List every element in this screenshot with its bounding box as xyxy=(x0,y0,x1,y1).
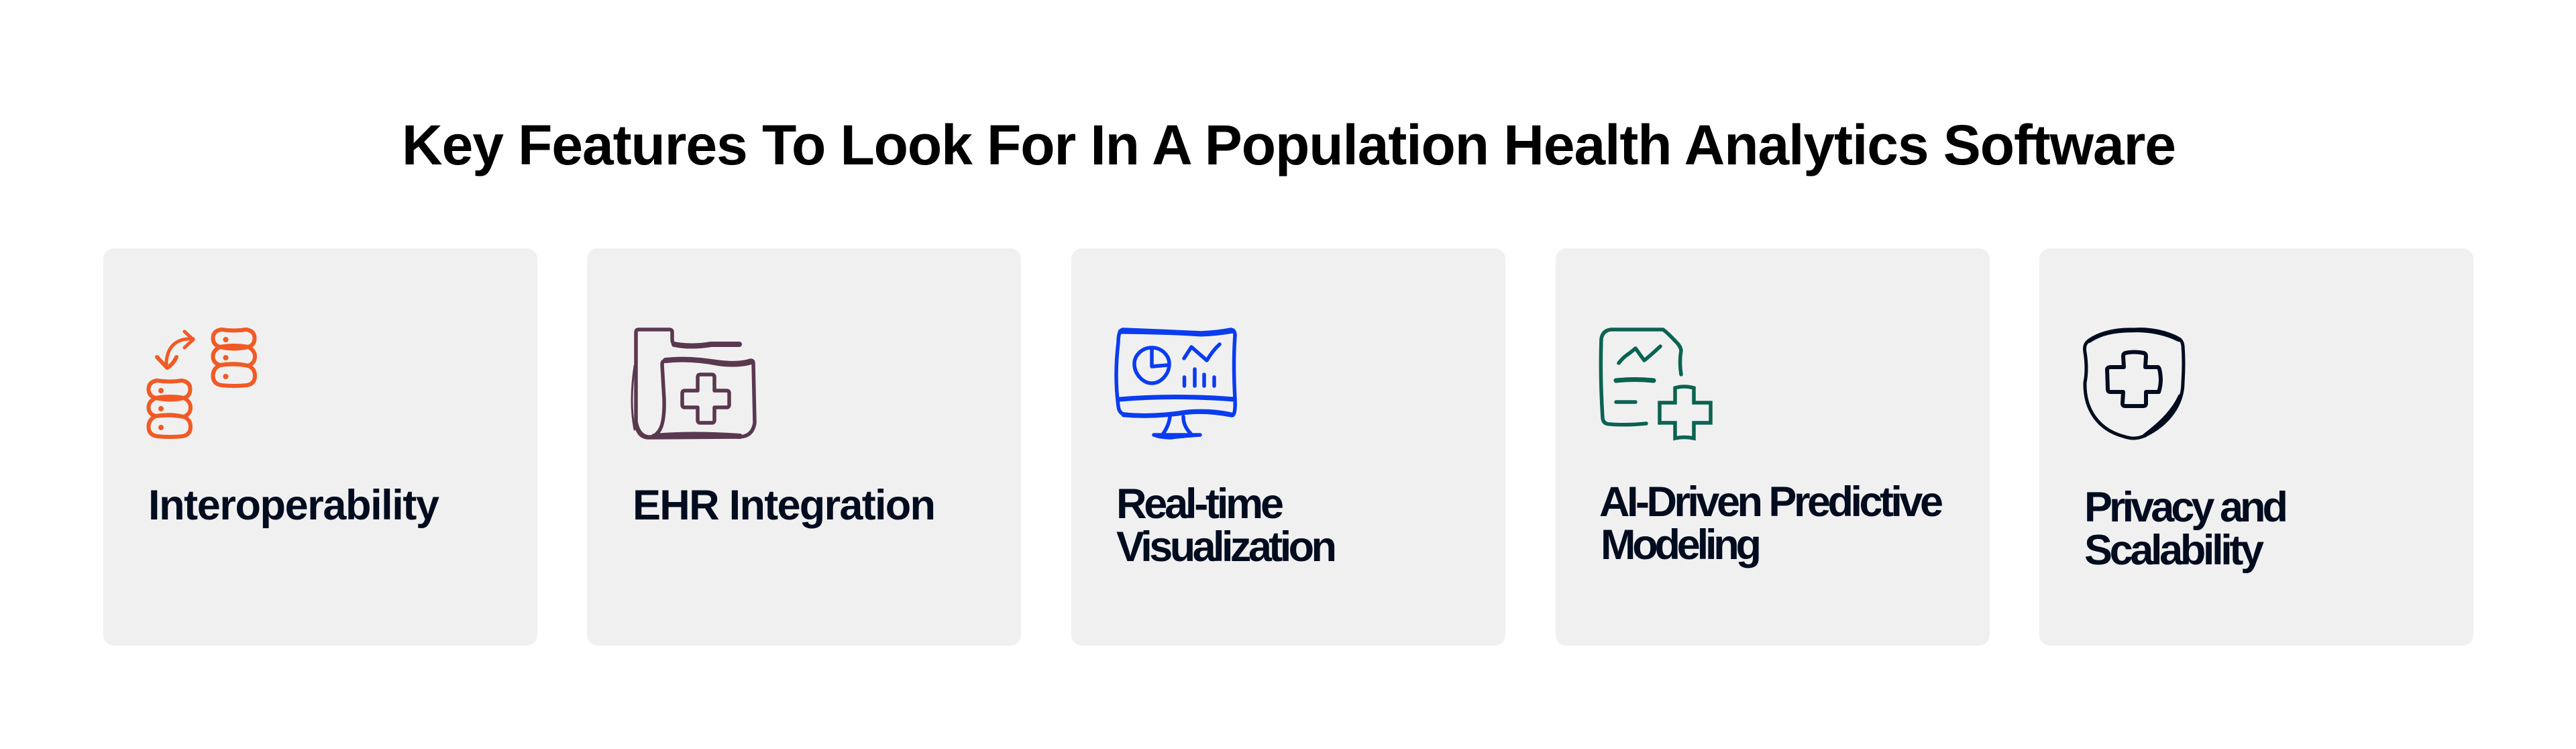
label: Real-time Visualization: Real-time xyxy=(1116,481,1284,528)
panel: interoperability xyxy=(103,248,537,646)
label: Real-time Visualization xyxy=(1116,481,1337,570)
label: EHR Integration: EHR Integration xyxy=(633,482,936,529)
panel: EHR integration xyxy=(587,248,1021,646)
panel: AI-driven predictive modeling xyxy=(1556,248,1990,646)
card background xyxy=(103,248,537,646)
icon: shield with cross xyxy=(2085,330,2184,438)
label: AI-Driven Predictive Modeling xyxy=(1599,479,1943,568)
icon: linked servers with arrows xyxy=(149,330,255,437)
label: AI-Driven Predictive Modeling: AI-Driven Predictive xyxy=(1599,479,1943,526)
label: Privacy and Scalability: Scalability xyxy=(2084,527,2264,574)
card background xyxy=(1556,248,1990,646)
label: Interoperability: Interoperability xyxy=(148,482,439,529)
panel: privacy and scalability xyxy=(2039,248,2473,646)
card background xyxy=(587,248,1021,646)
label: Privacy and Scalability: Privacy and xyxy=(2084,484,2288,531)
icon: monitor dashboard xyxy=(1116,330,1235,438)
card background xyxy=(2039,248,2473,646)
label: AI-Driven Predictive Modeling: Modeling xyxy=(1601,521,1762,568)
icon: medical folder xyxy=(632,330,755,438)
title: Key Features To Look For In A Population Health Analytics Software xyxy=(402,113,2176,177)
label: Real-time Visualization: Visualization xyxy=(1116,523,1337,570)
panel: real-time visualization xyxy=(1071,248,1505,646)
card background xyxy=(1071,248,1505,646)
icon: report with cross xyxy=(1601,330,1711,438)
label: Privacy and Scalability xyxy=(2084,484,2288,574)
